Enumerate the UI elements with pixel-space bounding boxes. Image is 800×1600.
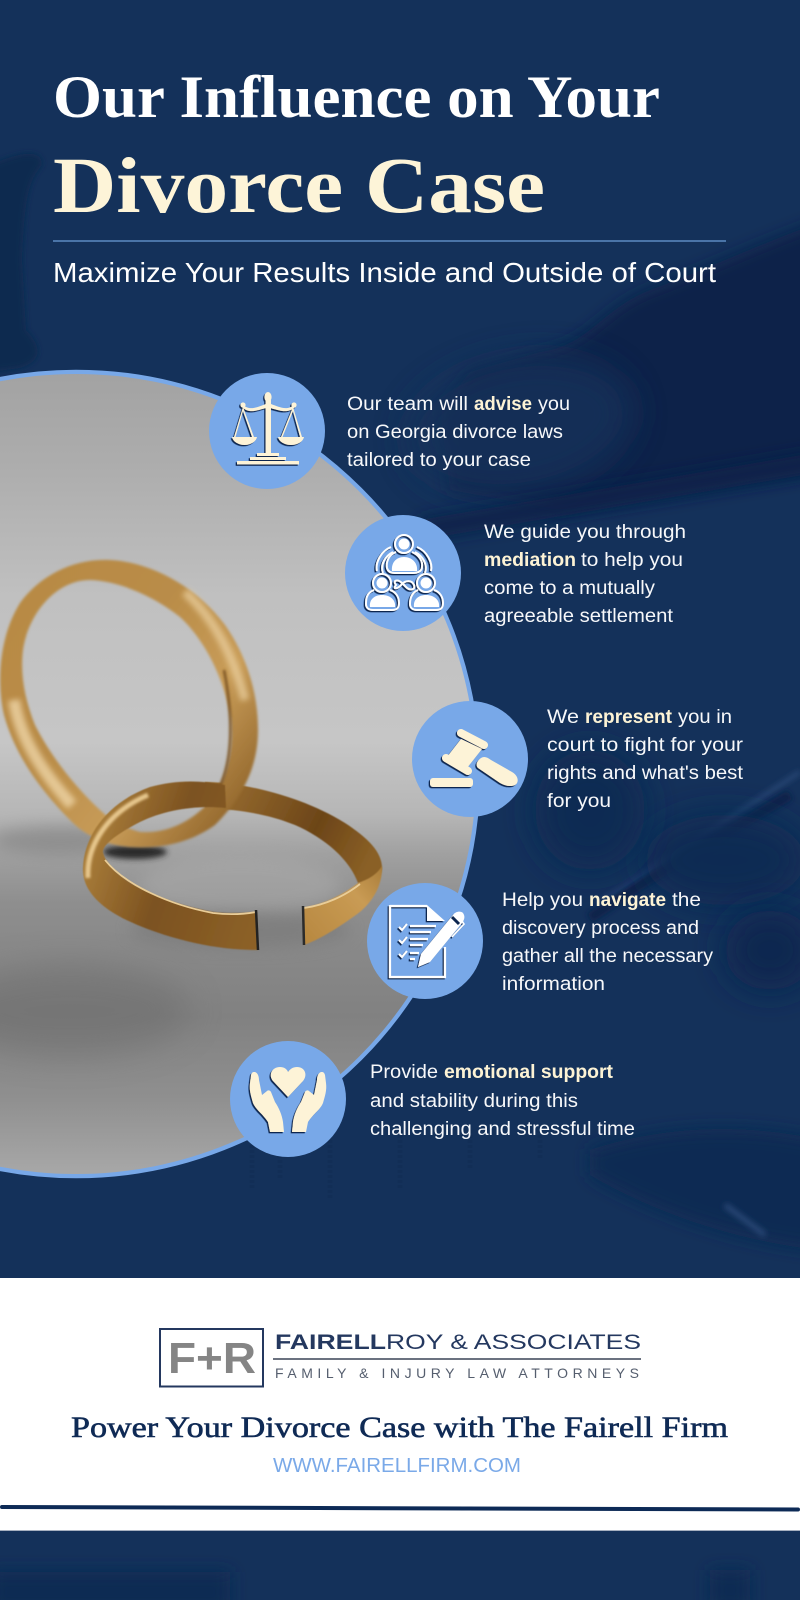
text: navigate: gather all the necessary (502, 945, 713, 967)
logo (160, 1329, 641, 1386)
text: represent: rights and what's best (547, 762, 744, 784)
text: advise: tailored to your case (347, 449, 531, 471)
logo: FAMILY & INJURY LAW ATTORNEYS (275, 1365, 639, 1381)
text: navigate: discovery process and (502, 917, 699, 939)
text: mediation: agreeable settlement (484, 605, 674, 627)
ring: open ring right part (303, 866, 382, 945)
subtitle: Maximize Your Results Inside and Outside of Court (53, 257, 716, 288)
ring: open ring back band (205, 782, 382, 884)
logo: ROY & ASSOCIATES (386, 1331, 641, 1354)
text: advise: you (538, 393, 570, 415)
text: navigate: information (502, 973, 605, 995)
title: Divorce Case: Divorce Case (53, 143, 545, 230)
text: emotional support: Provide (370, 1061, 438, 1083)
panel: white footer (0, 1278, 800, 1531)
text: represent: We (547, 706, 579, 728)
text: advise: on Georgia divorce laws (347, 421, 563, 443)
text: mediation: mediation (484, 549, 576, 571)
logo: FAIRELL (275, 1331, 386, 1354)
text: navigate: Help you (502, 889, 583, 911)
icon: scales of justice (209, 373, 325, 489)
website url: WWW.FAIRELLFIRM.COM (273, 1454, 521, 1477)
text: mediation: come to a mutually (484, 577, 655, 599)
text: represent: court to fight for your (547, 734, 744, 756)
text: emotional support: emotional support (444, 1061, 613, 1083)
footer tagline: Power Your Divorce Case with The Fairell Firm (71, 1411, 728, 1444)
ring: standing ring (0, 560, 258, 847)
text: advise: advise (474, 393, 532, 415)
panel: wedding rings photo in circle (0, 360, 490, 1190)
text: emotional support: and stability during this (370, 1090, 578, 1112)
title: Our Influence on Your: Our Influence on Your (53, 64, 660, 130)
text: represent: you in (678, 706, 732, 728)
text: mediation: to help you (581, 549, 683, 571)
text: represent: represent (585, 706, 672, 728)
text: navigate: the (672, 889, 701, 911)
footer divider (2, 1507, 798, 1510)
icon: mediation people (345, 515, 461, 631)
icon: hands holding heart (230, 1041, 346, 1157)
text: mediation: We guide you through (484, 521, 686, 543)
text: advise: Our team will (347, 393, 468, 415)
icon: document and pen (367, 883, 483, 999)
ring: open ring left part (83, 781, 258, 950)
text: represent: for you (547, 790, 611, 812)
icon: gavel (412, 701, 528, 817)
heading divider (53, 240, 726, 242)
logo: F+R (168, 1334, 256, 1383)
text: emotional support: challenging and stressful time (370, 1118, 635, 1140)
text: navigate: navigate (589, 889, 666, 911)
